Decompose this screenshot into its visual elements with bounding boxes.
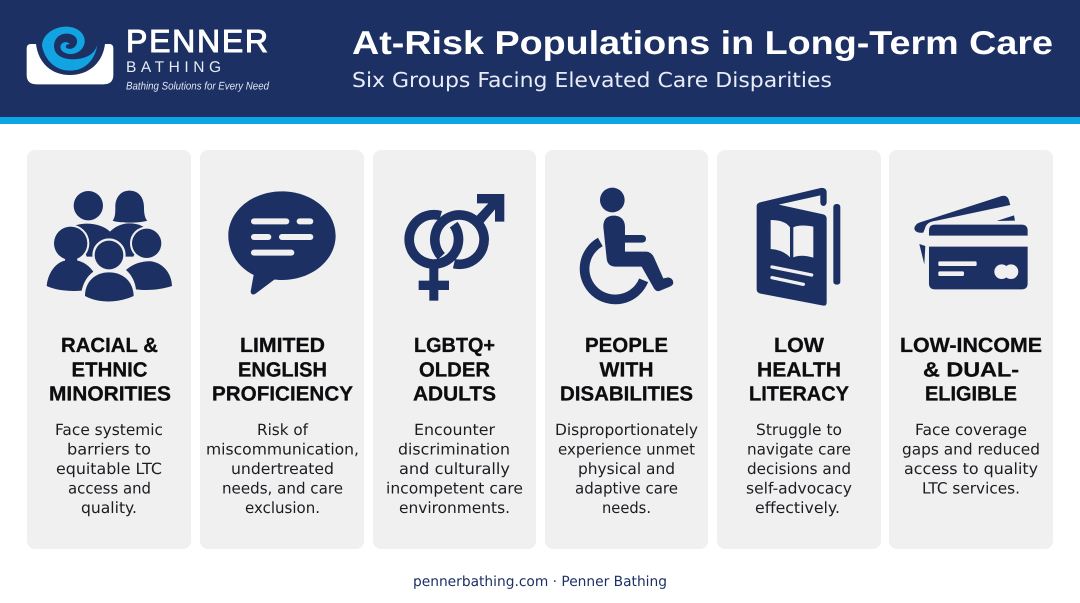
heading: [212, 334, 353, 406]
description: discrimination: [398, 440, 510, 458]
heading: LOW: [774, 334, 825, 357]
description: barriers to: [67, 440, 151, 458]
heading: LOW-INCOME: [900, 334, 1042, 357]
description: effectively.: [755, 499, 840, 517]
subtitle: Six Groups Facing Elevated Care Disparities: [352, 68, 832, 92]
description: [746, 421, 852, 517]
description: LTC services.: [922, 480, 1020, 498]
description: [55, 421, 163, 517]
logo: [27, 23, 270, 92]
panel: low-income and dual-eligible: [889, 150, 1053, 549]
panel: lgbtq+ older adults: [373, 150, 536, 549]
panel: people with disabilities: [545, 150, 708, 549]
heading: MINORITIES: [49, 382, 171, 406]
description: Risk of: [257, 421, 309, 439]
heading: PROFICIENCY: [212, 382, 353, 406]
heading: LIMITED: [240, 334, 325, 357]
description: decisions and: [747, 460, 851, 478]
heading: & DUAL-: [923, 358, 1019, 382]
description: needs, and care: [222, 480, 343, 498]
heading: OLDER: [419, 358, 490, 382]
description: access and: [68, 480, 151, 498]
description: [902, 421, 1040, 498]
heading: DISABILITIES: [560, 382, 693, 406]
heading: HEALTH: [757, 358, 841, 382]
description: [386, 421, 523, 517]
description: Disproportionately: [555, 421, 698, 439]
heading: [49, 334, 171, 406]
icon: bathtub with swirl: [27, 27, 113, 84]
description: physical and: [578, 460, 675, 478]
logo wordmark: PENNER: [126, 23, 268, 59]
footer: pennerbathing.com · Penner Bathing: [413, 574, 667, 590]
description: and culturally: [399, 460, 510, 478]
heading: ELIGIBLE: [925, 382, 1017, 406]
description: exclusion.: [245, 499, 320, 517]
description: Struggle to: [756, 421, 842, 439]
title: At-Risk Populations in Long-Term Care: [352, 24, 1053, 61]
description: [555, 421, 698, 517]
heading: ETHNIC: [72, 358, 148, 382]
icon: group of people: [47, 191, 172, 301]
icon: open booklet: [757, 188, 840, 306]
description: Face systemic: [55, 421, 163, 439]
icon: speech bubble: [228, 191, 336, 294]
description: adaptive care: [575, 480, 678, 498]
heading: PEOPLE: [585, 334, 668, 357]
description: Face coverage: [915, 421, 1027, 439]
icon: wheelchair user: [585, 188, 673, 299]
logo tagline: Bathing Solutions for Every Need: [126, 80, 270, 92]
description: gaps and reduced: [902, 440, 1040, 458]
heading: [413, 334, 496, 406]
heading: LITERACY: [749, 382, 849, 406]
heading: [900, 334, 1042, 406]
heading: WITH: [600, 358, 654, 382]
heading: [560, 334, 693, 406]
heading: RACIAL &: [61, 334, 158, 357]
description: environments.: [399, 499, 510, 517]
description: access to quality: [904, 460, 1038, 478]
description: incompetent care: [386, 480, 523, 498]
heading: [749, 334, 849, 406]
panel: racial and ethnic minorities: [27, 150, 191, 549]
description: needs.: [602, 499, 651, 517]
heading: LGBTQ+: [414, 334, 495, 357]
panel: limited english proficiency: [200, 150, 364, 549]
icon: interlocked gender symbols: [409, 194, 504, 301]
description: experience unmet: [558, 440, 695, 458]
description: equitable LTC: [56, 460, 162, 478]
description: quality.: [81, 499, 137, 517]
logo subname: BATHING: [126, 59, 221, 76]
icon: credit cards: [914, 196, 1028, 289]
description: self-advocacy: [746, 480, 852, 498]
heading: ENGLISH: [238, 358, 327, 382]
description: miscommunication,: [206, 440, 359, 458]
description: undertreated: [231, 460, 334, 478]
description: Encounter: [414, 421, 496, 439]
header band: [0, 0, 1080, 124]
panel: low health literacy: [717, 150, 881, 549]
description: navigate care: [747, 440, 851, 458]
description: [206, 421, 359, 517]
heading: ADULTS: [413, 382, 496, 406]
